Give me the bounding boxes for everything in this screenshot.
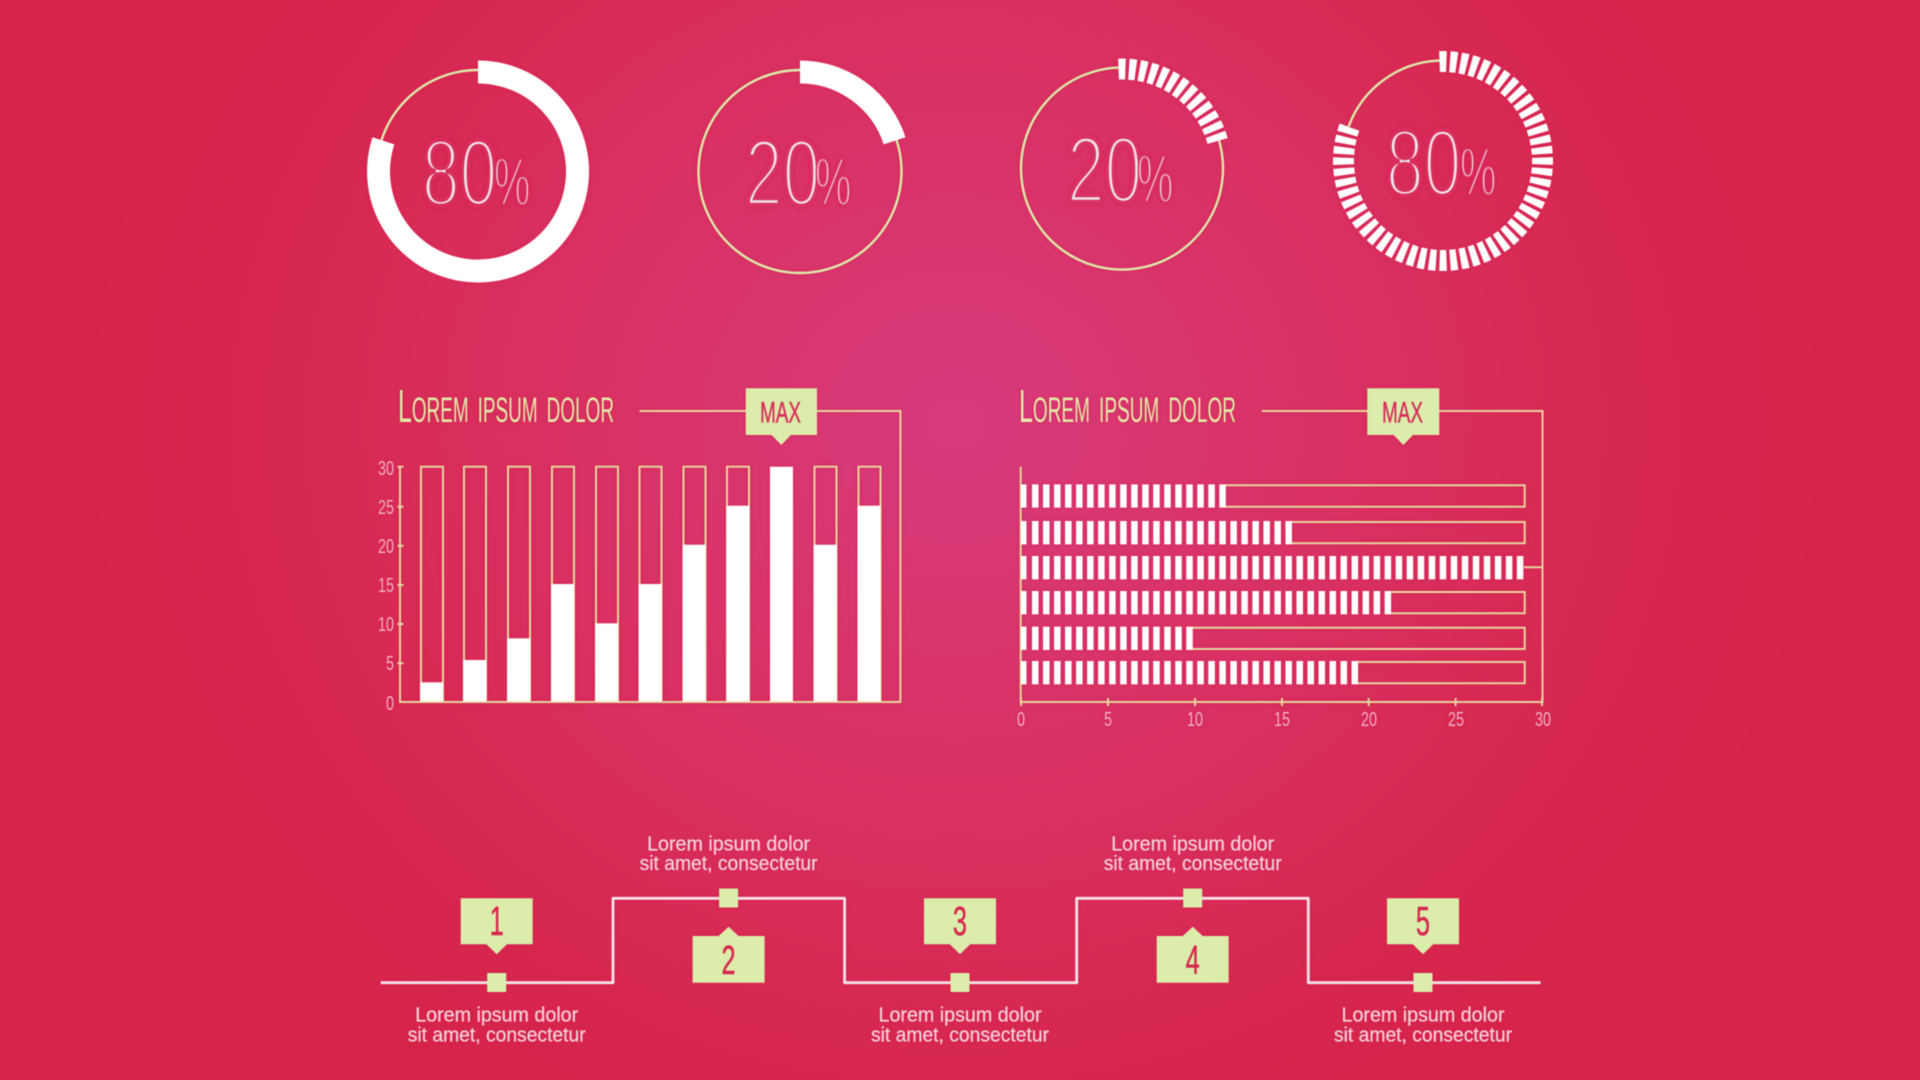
step 4 [1104,834,1282,984]
y axis labels: 15 [378,575,394,597]
donut gauge: 20% solid [698,70,902,273]
step 4: 4 [1186,938,1200,984]
y axis labels: 10 [378,614,394,636]
step 3 [871,898,1049,1046]
callout: MAX [1367,388,1439,445]
x axis labels: 25 [1448,709,1464,731]
donut gauge: 80% solid [376,70,580,273]
step 1: sit amet, consectetur [408,1024,586,1046]
chart frame and axis [398,411,900,702]
step 4: sit amet, consectetur [1104,853,1282,875]
step 1 [408,898,586,1046]
x axis labels: 5 [1104,709,1112,731]
step 2: Lorem ipsum dolor [647,834,810,856]
x axis labels: 20 [1361,709,1377,731]
step 2: sit amet, consectetur [640,853,818,875]
label: 80% [422,121,530,226]
segmented bar fills [1021,496,1523,673]
step 3: Lorem ipsum dolor [878,1004,1042,1026]
y axis labels: 20 [378,536,394,558]
x axis labels: 15 [1274,709,1290,731]
y axis labels: 30 [378,458,394,480]
label: 20%: % [815,143,851,220]
donut gauge: 80% ticked [1344,61,1542,260]
x axis labels: 0 [1017,709,1025,731]
step 1: Lorem ipsum dolor [415,1004,579,1026]
bar outlines [1192,485,1525,683]
callout: MAX [746,388,817,445]
donut gauge: 20% ticked [1021,68,1223,270]
y axis labels: 5 [386,653,394,675]
label: 80%: 80 [422,121,497,226]
step 2: 2 [722,938,736,984]
step 3: 3 [953,899,967,945]
callout: MAX: MAX [760,397,801,430]
x axis labels: 10 [1187,709,1203,731]
column outlines [421,467,880,702]
label: 80%: % [1460,133,1496,210]
step 5: Lorem ipsum dolor [1342,1004,1505,1026]
step 4: Lorem ipsum dolor [1111,834,1275,856]
y axis labels [378,458,394,715]
x axis labels [1017,709,1551,731]
callout: MAX: MAX [1382,397,1423,430]
label: 20%: % [1137,140,1173,217]
label: 80% [1386,111,1496,216]
step 5: sit amet, consectetur [1334,1024,1512,1046]
label: 20%: 20 [1067,118,1142,223]
chart frame and axis [1021,411,1542,706]
column fills [420,467,880,701]
step 5 [1334,898,1512,1046]
step 5: 5 [1416,899,1430,945]
x axis labels: 30 [1535,709,1551,731]
timeline path [381,898,1541,983]
panel: stepped timeline [381,834,1541,1046]
label: 80%: % [494,143,530,220]
label: 20%: 20 [745,121,820,226]
panel: horizontal bar chart [1017,380,1551,731]
panel: column chart [378,380,900,715]
y axis labels: 0 [386,693,394,715]
heading: bar chart title: LOREM IPSUM DOLOR [1019,380,1236,432]
y axis labels: 25 [378,497,394,519]
step 3: sit amet, consectetur [871,1024,1049,1046]
step 1: 1 [490,899,504,945]
heading: column chart title: LOREM IPSUM DOLOR [398,380,614,432]
label: 80%: 80 [1386,111,1461,216]
step 2 [640,834,818,984]
